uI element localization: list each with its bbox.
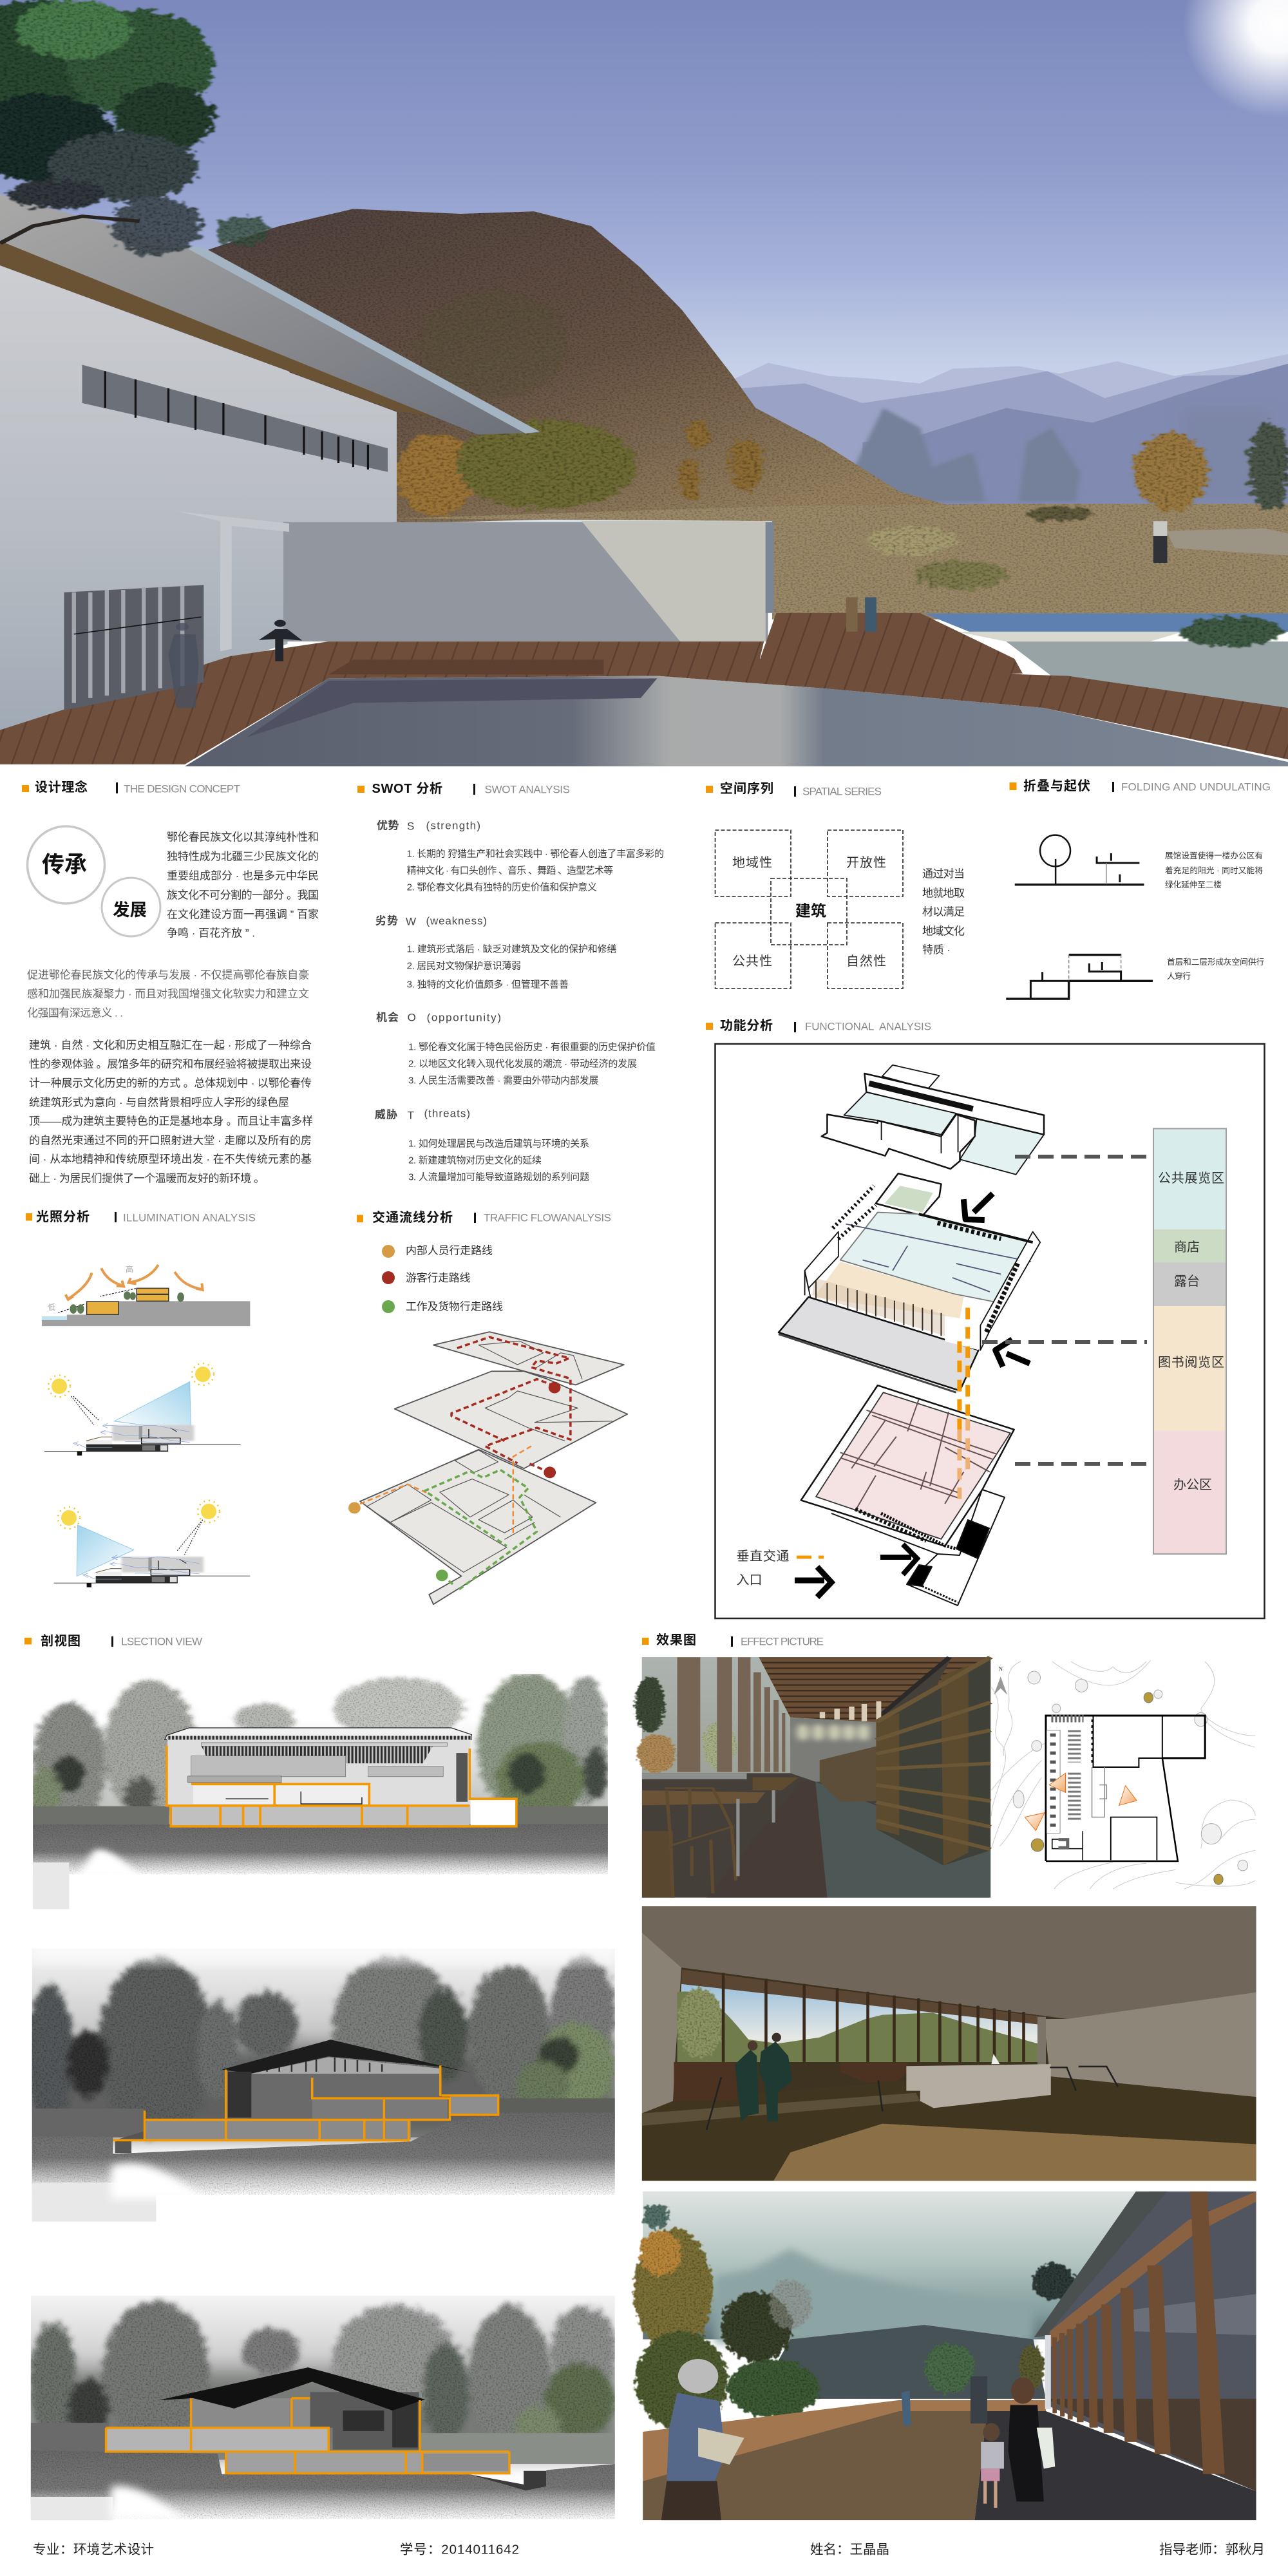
heading: functional analysis [706,1018,931,1033]
footer: student information [33,2543,1265,2557]
render: reception hall [642,1906,1256,2181]
section: functional analysis [706,1018,1265,1618]
heading: traffic [357,1209,611,1225]
SWOT: opportunity: 3. 人民生活需要改善 · 需要由外带动内部发展 [408,1075,599,1086]
heading: folding [1010,778,1271,793]
section drawing one [28,1673,608,1909]
section three: ground [31,2450,615,2520]
text: intro paragraph: 鄂伦春民族文化以其淳纯朴性和 [167,831,319,844]
heading: illumination: 光照分析 [36,1209,90,1224]
SWOT: strength: 1. 长期的 狩猎生产和社会实践中 · 鄂伦春人创造了丰富多彩的 [407,848,664,859]
section: traffic flow analysis [348,1209,627,1604]
hall: bookshelves [674,2062,907,2101]
text: intro paragraph: 重要组成部分 · 也是多元中华民 [167,869,319,882]
SWOT: strength: S [407,820,414,832]
text: spatial note: 地就地取 [922,887,965,899]
hall: window wall with view [677,1969,1046,2068]
entrance arrow [880,1544,917,1575]
diagram: grey space section [1006,955,1153,999]
text: second paragraph: 感和加强民族凝聚力 · 而且对我国增强文化软实力和建立文 [27,988,309,1000]
route endpoint markers [348,1382,560,1581]
text: third paragraph: 统建筑形式为意向 · 与自然背景相呼应人字形的绿色屋 [29,1096,289,1109]
heading: SWOT: SWOT ANALYSIS [484,783,570,796]
text: third paragraph: 础上 · 为居民们提供了一个温暖而友好的新环境 。 [29,1172,265,1185]
diagram: site wind section [42,1264,250,1326]
text: intro paragraph: 族文化不可分割的一部分 。我国 [167,889,319,902]
legend: routes: 内部人员行走路线 [406,1244,493,1257]
terrace: mother and child [981,2378,1055,2508]
text: second paragraph: 化强国有深远意义 . . [27,1007,123,1019]
section one: building [165,1728,516,1826]
clerestory window strip [82,365,388,472]
meadow [394,504,1288,620]
heading: traffic: TRAFFIC FLOWANALYSIS [484,1212,611,1224]
function colour column: 商店 [1174,1240,1200,1255]
heading: spatial series: 空间序列 [720,781,773,796]
axon: upper floor [822,1065,1044,1175]
library: back shelves [820,1747,876,1802]
low concrete wall [176,511,774,651]
circle: development [102,878,160,936]
section one: trees [28,1673,608,1827]
blue pool and white edge [924,614,1288,709]
circle: inheritance: 传承 [42,853,87,877]
plan: landscape trees [1013,1671,1248,1884]
heading: design concept: THE DESIGN CONCEPT [124,783,240,795]
text: spatial note: 材以满足 [922,905,965,918]
footer: student information: 指导老师：郭秋月 [1159,2543,1265,2557]
render: library interior [636,1657,990,1898]
SWOT: threats [375,1108,589,1182]
heading: functional analysis: 功能分析 [720,1018,773,1033]
floor plate: ground [360,1450,596,1604]
SWOT: strength: 精神文化 · 有口头创作 、音乐 、舞蹈 、造型艺术等 [407,864,613,876]
text: second paragraph: 促进鄂伦春民族文化的传承与发展 · 不仅提高鄂伦春族自豪 [27,969,309,981]
SWOT: weakness: 劣势 [375,914,398,927]
SWOT: opportunity: 机会 [376,1011,399,1024]
terrace: building glazing and roof [1034,2192,1256,2491]
text: third paragraph: 建筑 · 自然 · 文化和历史相互融汇在一起 · 形成了一种综合 [29,1039,312,1051]
section: design concept [22,779,319,1185]
terrace: background visitors [902,2376,987,2425]
text: spatial note [922,868,965,956]
text: spatial note: 通过对当 [922,868,965,880]
text: folding note one [1165,851,1263,889]
heading: functional analysis: FUNCTIONAL ANALYSIS [805,1020,931,1033]
distant mountain ranges [735,354,1288,511]
main white wall [0,265,397,732]
footer: student information: 姓名：王晶晶 [810,2543,889,2557]
function colour column: 公共展览区 [1158,1171,1224,1186]
SWOT: threats: 3. 人流量增加可能导致道路规划的系列问题 [408,1172,589,1182]
section: section views [24,1633,616,2520]
footer: student information: 专业：环境艺术设计 [33,2543,154,2557]
terrace: wood deck [643,2411,1256,2520]
SWOT: strength: 2. 鄂伦春文化具有独特的历史价值和保护意义 [407,881,597,893]
circle: inheritance [27,826,104,904]
library: floor [706,1782,990,1898]
SWOT: opportunity: (opportunity) [427,1011,501,1024]
function colour column: 露台 [1174,1274,1200,1289]
section: folding and undulating [1006,778,1271,999]
SWOT: opportunity: 1. 鄂伦春文化属于特色民俗历史 · 有很重要的历史保护价值 [408,1042,656,1052]
diagram: overlapping dashed boxes [715,830,903,989]
heading: effect picture: 效果图 [656,1633,696,1647]
heading: effect picture: EFFECT PICTURE [741,1636,824,1647]
SWOT: weakness: 2. 居民对文物保护意识薄弱 [407,960,521,971]
legend: routes [382,1244,503,1313]
diagram: site wind section: 低 [48,1303,55,1312]
legend: vertical circulation and entrance [737,1549,831,1597]
library: tables and chairs [642,1773,799,1898]
diagram: overlapping dashed boxes: 地域性 [732,855,772,870]
lower glazed opening [64,585,204,710]
axon: black entrance arrows [963,1193,1030,1367]
section two: misty trees [24,1940,616,2137]
wooden deck [0,613,1288,764]
plan: building outline [1046,1716,1205,1861]
SWOT: threats: 1. 如何处理居民与改造后建筑与环境的关系 [408,1137,589,1149]
function colour column: 办公区 [1173,1477,1212,1492]
pale boulders [1166,529,1288,556]
frame: functional diagram [715,1044,1265,1618]
diagram: overlapping dashed boxes: 公共性 [732,954,772,969]
SWOT: strength: (strength) [426,819,480,832]
SWOT: opportunity [376,1011,656,1086]
footer: student information: 学号：2014011642 [400,2543,519,2557]
roof overhang [0,194,540,435]
floor plate: top [433,1332,624,1385]
terrace: timber parapet [643,2400,1046,2481]
text: third paragraph [29,1039,313,1185]
hall: reception desk [906,2064,1051,2108]
section: effect pictures [633,1633,1256,2520]
library: window and trees [636,1657,990,1898]
legend: vertical circulation and entrance: 入口 [737,1573,762,1587]
text: third paragraph: 的自然光束通过不同的开口照射进大堂 · 走廊以及所有的房 [29,1135,312,1146]
diagram: exploded floor plates with routes [348,1332,627,1604]
section drawing two [24,1940,616,2222]
SWOT: strength: 优势 [377,819,399,832]
library: big bookshelf [876,1657,990,1866]
text: folding note two: 人穿行 [1167,971,1191,981]
text: intro paragraph: 争鸣 · 百花齐放 ” . [167,927,255,939]
section one: lawn bands [33,1806,608,1824]
render: terrace with mountain mist [633,2192,1256,2520]
text: folding note one: 展馆设置使得一楼办公区有 [1165,851,1263,860]
heading: illumination [26,1209,256,1224]
SWOT: weakness: (weakness) [426,914,487,927]
axon: orange vertical circulation [960,1308,968,1504]
site plan [991,1660,1255,1889]
axon: ground floor [801,1385,1014,1546]
heading: SWOT: SWOT 分析 [372,781,442,796]
text: third paragraph: 间 · 从本地精神和传统原型环境出发 · 在不失传统元素的基 [29,1153,312,1166]
text: intro paragraph: 独特性成为北疆三少民族文化的 [167,850,319,863]
heading: effect picture [642,1633,824,1647]
section two: building [113,2040,498,2153]
terrace: hazy hills [715,2249,1046,2399]
sky with sun [0,0,1288,541]
SWOT: weakness [375,914,616,990]
heading: spatial series [706,781,882,797]
heading: folding: 折叠与起伏 [1023,778,1090,793]
section three: trees [31,2295,616,2464]
reflecting water [185,676,1288,766]
text: folding note one: 绿化延伸至二楼 [1165,880,1222,889]
large tree top left [0,0,270,256]
SWOT: threats: 威胁 [375,1108,397,1121]
terrace: woman with hat [661,2359,744,2520]
section two: ground [32,2113,615,2222]
rocky mountain [205,209,961,524]
text: spatial note: 地域文化 [922,925,965,938]
SWOT: strength [377,819,664,893]
legend: routes: 游客行走路线 [406,1272,470,1284]
route: staff orange [360,1446,531,1534]
text: folding note one: 着充足的阳光 · 同时又能将 [1165,866,1263,875]
SWOT: opportunity: 2. 以地区文化转入现代化发展的潮流 · 带动经济的发展 [408,1059,637,1069]
heading: design concept [22,779,240,795]
leader dashes [982,1157,1147,1464]
library: timber ceiling [759,1657,990,1722]
hall: handrails [706,2067,1118,2130]
plan: view cones [1025,1773,1137,1831]
diagram: site wind section: 高 [126,1264,133,1274]
circle: development: 发展 [113,900,147,920]
heading: spatial series: SPATIAL SERIES [802,786,882,797]
heading: traffic: 交通流线分析 [372,1209,453,1225]
legend: vertical circulation and entrance: 垂直交通 [737,1549,790,1564]
text: folding note two [1167,958,1264,981]
function colour column: 图书阅览区 [1158,1355,1224,1370]
SWOT: weakness: 3. 独特的文化价值颇多 · 但管理不善善 [407,979,569,990]
axon: middle floor [779,1173,1040,1392]
exploded axonometric [779,1065,1044,1546]
text: third paragraph: 计一种展示文化历史的新的方式 。总体规划中 · 以鄂伦春传 [29,1077,312,1090]
section: spatial series [706,781,965,989]
legend: routes: 工作及货物行走路线 [406,1301,503,1312]
SWOT: opportunity: O [408,1011,416,1024]
text: spatial note: 特质 · [922,944,951,956]
SWOT: weakness: 1. 建筑形式落后 · 缺乏对建筑及文化的保护和修缮 [407,944,616,954]
section drawing three [31,2295,616,2520]
section: SWOT analysis [357,781,664,1182]
people on deck [168,521,1167,708]
autumn trees [396,290,1288,590]
hall: floor [642,2076,1256,2181]
SWOT: threats: T [408,1109,414,1122]
terrace: left trees [633,2204,1075,2430]
heading: section view: 剖视图 [41,1633,80,1649]
route: visitors red [451,1337,571,1472]
function colour column [1153,1128,1226,1554]
diagram: overlapping dashed boxes: 自然性 [846,954,886,969]
section: illumination analysis [26,1209,256,1587]
plan: north arrow: N [998,1666,1003,1672]
hall: ceiling and walls [642,1906,1256,2181]
library: back wall with lights [790,1718,876,1782]
hero render: building by the mountain lake [0,0,1288,766]
section one: ground [33,1824,608,1909]
text: intro paragraph: 在文化建设方面一再强调 ” 百家 [167,908,319,921]
hall: visitors [735,2033,999,2121]
heading: design concept: 设计理念 [35,779,88,795]
SWOT: threats: (threats) [424,1108,470,1119]
route: goods green [425,1470,537,1589]
heading: illumination: ILLUMINATION ANALYSIS [123,1212,256,1224]
text: third paragraph: 顶——成为建筑主要特色的正是基地本身 。而且让丰富多样 [29,1115,313,1127]
text: third paragraph: 性的参观体验 。展馆多年的研究和布展经验将被提取出来设 [29,1058,312,1070]
plan: contour lines [991,1660,1255,1889]
text: intro paragraph [167,831,319,939]
entrance stair block and forecourt [831,1490,1005,1605]
heading: section view: LSECTION VIEW [121,1636,202,1647]
section three: building [106,2367,546,2490]
floor plate: middle [395,1371,627,1468]
diagram: overlapping dashed boxes: 建筑 [795,903,826,920]
SWOT: weakness: W [406,916,416,927]
diagram: winter sun [54,1501,250,1587]
diagram: tree and terrace section [1015,835,1144,885]
SWOT: threats: 2. 新建建筑物对历史文化的延续 [408,1155,542,1166]
heading: folding: FOLDING AND UNDULATING [1121,781,1271,793]
heading: section view [24,1633,202,1649]
terrace: misty sky [643,2192,1256,2339]
heading: SWOT [357,781,570,796]
text: folding note two: 首层和二层形成灰空间供行 [1167,958,1264,967]
plan: north arrow [994,1666,1007,1695]
text: second paragraph [27,969,309,1019]
diagram: summer sun [44,1363,241,1455]
diagram: overlapping dashed boxes: 开放性 [846,855,886,870]
